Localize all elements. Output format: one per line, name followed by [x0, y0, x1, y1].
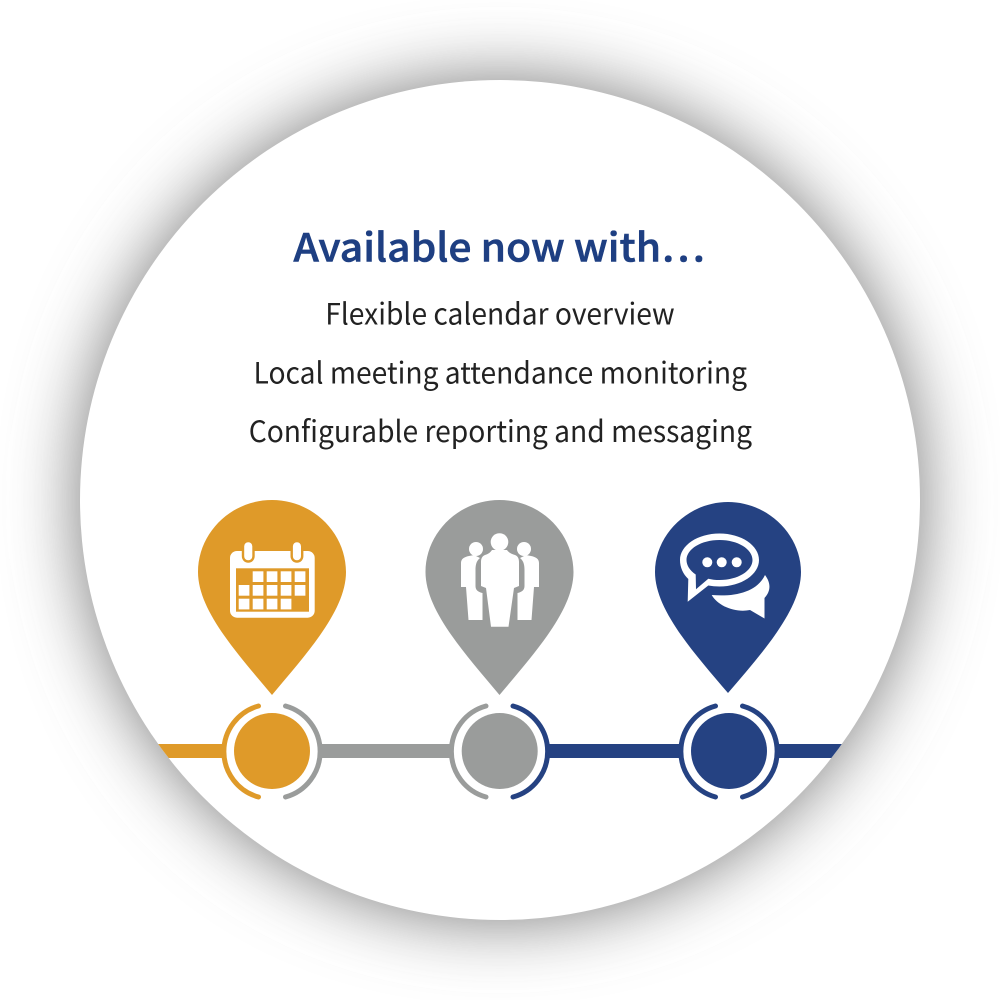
feature: calendar: Flexible calendar overview [325, 291, 675, 333]
timeline segment: gray [321, 744, 451, 758]
pin shape blue [655, 502, 801, 693]
drop shadow [80, 80, 920, 920]
icon: speech bubbles [680, 534, 769, 618]
pin shape gray [426, 500, 574, 695]
marker 3 left arc [681, 706, 716, 797]
timeline segment: orange [158, 744, 222, 758]
icon: calendar [230, 541, 315, 618]
marker 3 dot [691, 713, 767, 789]
marker 2 right arc [513, 706, 548, 797]
marker 3 right arc [742, 706, 777, 797]
pin: messaging [655, 502, 801, 693]
pin: calendar [198, 500, 346, 695]
feature: attendance: Local meeting attendance monitoring [254, 350, 747, 392]
marker 2 [451, 706, 548, 797]
feature: reporting: Configurable reporting and messaging [249, 409, 752, 451]
timeline segment: blue [549, 744, 681, 758]
pin shape orange [198, 500, 346, 695]
panel: white circle [80, 80, 920, 920]
title: Available now with… [294, 218, 705, 274]
timeline [150, 744, 850, 758]
timeline segment: blue end [779, 744, 842, 758]
pin: people [426, 500, 574, 695]
icon: people [461, 533, 539, 627]
marker 1 left arc [224, 706, 258, 797]
marker 2 left arc [451, 706, 486, 797]
marker 1 [224, 706, 320, 797]
marker 3 [681, 706, 777, 797]
marker 1 dot [234, 713, 310, 789]
text block: features [249, 291, 752, 451]
marker 1 right arc [286, 706, 320, 797]
marker 2 dot [462, 713, 538, 789]
